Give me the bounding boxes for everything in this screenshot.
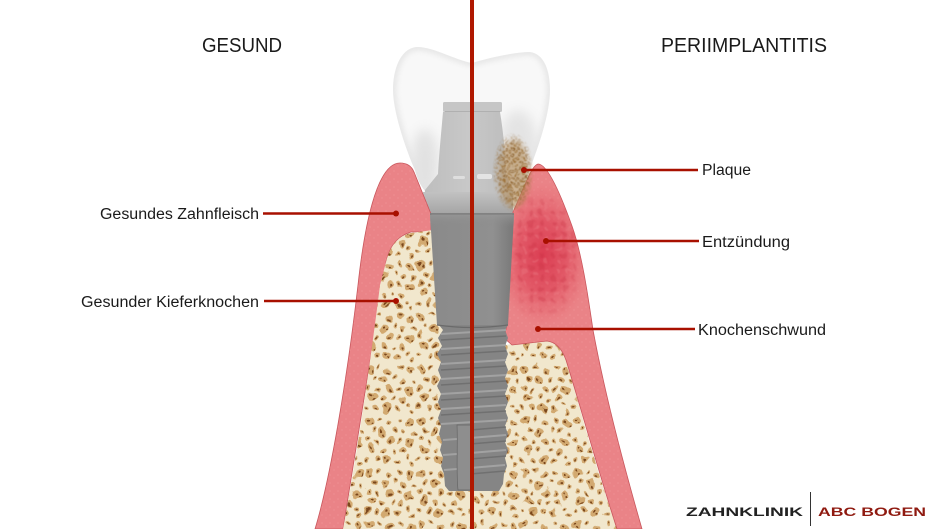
callout: entzündung: Entzündung bbox=[702, 234, 790, 251]
right gum: Entzündung und Knochenschwund bbox=[504, 164, 642, 529]
callout: entzündung bbox=[543, 234, 790, 251]
left gum: gesundes Zahnfleisch bbox=[315, 163, 431, 529]
callout: plaque: Plaque bbox=[702, 162, 751, 179]
abutment bbox=[423, 102, 513, 214]
implant body bbox=[430, 213, 514, 491]
callout: plaque bbox=[521, 162, 751, 179]
callout: gesunder Kieferknochen bbox=[81, 294, 399, 311]
inflammation glow bbox=[510, 190, 582, 318]
heading: gesund: GESUND bbox=[202, 35, 282, 57]
tooth crown bbox=[393, 47, 550, 210]
heading: periimplantitis: PERIIMPLANTITIS bbox=[661, 35, 827, 57]
logo: Zahnklinik ABC Bogen: ABC BOGEN bbox=[818, 507, 926, 519]
center divider line bbox=[470, 0, 474, 529]
logo: Zahnklinik ABC Bogen bbox=[686, 492, 926, 526]
callout: knochenschwund: Knochenschwund bbox=[698, 322, 826, 339]
callout: gesunder Kieferknochen: Gesunder Kieferknochen bbox=[81, 294, 259, 311]
callout: gesundes Zahnfleisch: Gesundes Zahnfleisch bbox=[100, 206, 259, 223]
right bone bbox=[474, 342, 616, 529]
callout: gesundes Zahnfleisch bbox=[100, 206, 399, 223]
plaque deposit bbox=[492, 134, 534, 211]
logo: Zahnklinik ABC Bogen: ZAHNKLINIK bbox=[686, 507, 804, 519]
left bone: gesunder Kieferknochen bbox=[343, 230, 470, 529]
callout: knochenschwund bbox=[535, 322, 826, 339]
